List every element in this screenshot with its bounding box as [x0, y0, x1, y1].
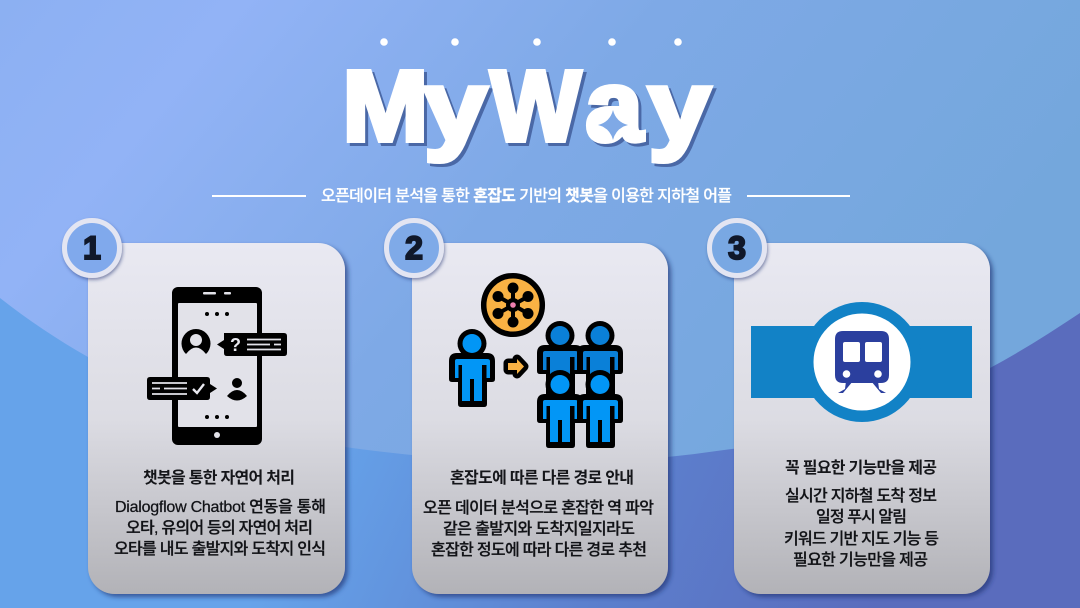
body text	[423, 499, 654, 559]
title: MyWay: W	[490, 50, 581, 162]
icon: crowd and virus	[449, 276, 623, 448]
heading: 꼭 필요한 기능만을 제공	[785, 459, 937, 477]
number badge 1: 1	[83, 230, 101, 266]
title: MyWay: y	[427, 53, 490, 165]
title: MyWay: y	[648, 51, 711, 162]
body text: 혼잡한 정도에 따라 다른 경로 추천	[431, 541, 647, 559]
subtitle with side rules: 오픈데이터 분석을 통한 혼잡도 기반의 챗봇을 이용한 지하철 어플	[321, 187, 732, 205]
panel: only essential features	[710, 220, 990, 594]
panel: congestion based routing	[386, 220, 668, 594]
panel: natural language chatbot	[64, 220, 345, 594]
body text: 실시간 지하철 도착 정보	[785, 487, 937, 505]
number badge 3	[710, 220, 764, 276]
body text: 같은 출발지와 도착지일지라도	[443, 520, 635, 538]
body text: 오타를 내도 출발지와 도착지 인식	[114, 540, 326, 558]
title: MyWay: y	[652, 54, 714, 165]
body text: 오타, 유의어 등의 자연어 처리	[126, 519, 313, 537]
icon: phone with chat bubbles	[147, 287, 287, 445]
body text: Dialogflow Chatbot 연동을 통해	[115, 498, 326, 516]
body text: 오픈 데이터 분석으로 혼잡한 역 파악	[423, 499, 654, 517]
heading: 혼잡도에 따른 다른 경로 안내	[450, 469, 634, 487]
title: MyWay: W	[494, 53, 584, 165]
decorative dots above the title	[380, 38, 682, 46]
title: MyWay: M	[346, 53, 431, 165]
number badge 2: 2	[405, 230, 423, 266]
body text: 일정 푸시 알림	[816, 508, 907, 526]
title: MyWay: a	[588, 53, 647, 165]
number badge 1	[64, 220, 120, 276]
number badge 3: 3	[728, 230, 746, 266]
number badge 2	[386, 220, 442, 276]
heading: 챗봇을 통한 자연어 처리	[143, 469, 295, 487]
title: MyWay: a	[586, 50, 644, 162]
title: MyWay: y	[424, 50, 487, 162]
icon: subway station sign	[751, 302, 972, 422]
body text	[114, 498, 326, 558]
title: MyWay: M	[342, 50, 428, 162]
title: MyWay	[342, 50, 714, 165]
icon: phone with chat bubbles: ?	[230, 335, 241, 355]
body text: 키워드 기반 지도 기능 등	[784, 530, 939, 548]
body text	[784, 487, 939, 569]
body text: 필요한 기능만을 제공	[793, 551, 928, 569]
